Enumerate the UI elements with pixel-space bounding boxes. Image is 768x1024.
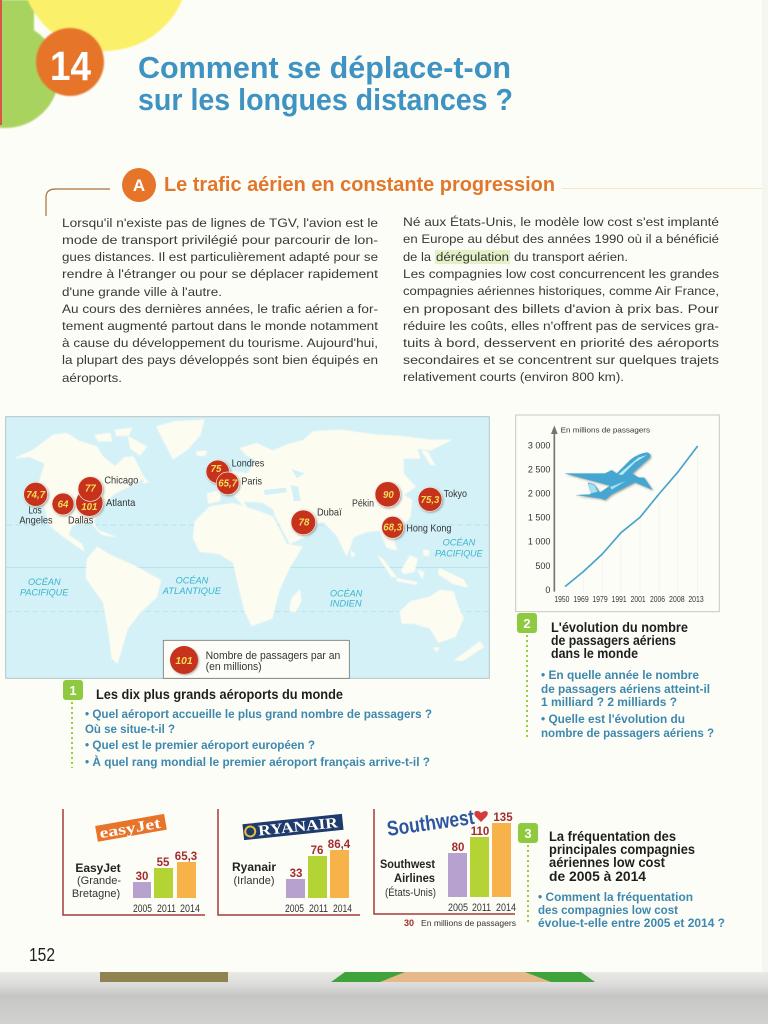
x axis: 2013 — [688, 595, 704, 604]
airport values: 68,3 — [383, 523, 403, 534]
airport values: 101 — [81, 502, 97, 513]
caption 2: evolution: L'évolution du nombre — [551, 620, 688, 635]
airport values: 65,7 — [218, 479, 238, 490]
ocean labels: OCÉAN — [176, 576, 209, 586]
continents west — [16, 420, 207, 663]
company label — [380, 857, 436, 899]
y axis: 1 500 — [528, 513, 550, 523]
city labels: Chicago — [104, 475, 138, 486]
caption 1: airports: • Quel aéroport accueille le plus grand nombre de passagers ? — [85, 709, 432, 721]
line chart: passengers: En millions de passagers — [561, 426, 650, 435]
text column right: de la — [403, 250, 431, 264]
text column left: rendre à l'étranger ou pour se déplacer rapidement — [62, 267, 379, 281]
title: sur les longues distances ? — [138, 82, 513, 117]
airport values: 64 — [58, 499, 69, 510]
ocean labels: OCÉAN — [330, 589, 363, 599]
x axis: 1991 — [612, 595, 627, 604]
ocean labels — [20, 538, 483, 609]
city labels: Atlanta — [106, 498, 136, 509]
airport values: 77 — [85, 484, 96, 495]
bar chart: Southwest: 2014 — [496, 902, 516, 914]
caption 2: evolution: • Quelle est l'évolution du — [541, 714, 685, 726]
x axis: 1969 — [573, 595, 589, 604]
caption 2: evolution: de passagers aériens atteint-il — [541, 684, 710, 696]
y axis — [528, 440, 550, 595]
chapter number badge — [36, 28, 104, 96]
text column left: d'une grande ville à l'autre. — [62, 285, 222, 299]
x axis: 2006 — [650, 595, 665, 604]
caption 3: low cost: évolue-t-elle entre 2005 et 2014 ? — [538, 918, 725, 930]
unit note: En millions de passagers — [421, 918, 516, 928]
text column left: la plupart des pays développés sont bien équipés en — [62, 353, 378, 367]
bar chart: Ryanair: 2011 — [309, 903, 328, 915]
bar chart: Southwest: 110 — [471, 826, 489, 838]
continents east — [193, 430, 483, 660]
city labels: Dubaï — [317, 508, 342, 519]
inland seas — [264, 469, 305, 501]
text column left — [62, 216, 379, 385]
text column left: Lorsqu'il n'existe pas de lignes de TGV, l'avion est le — [62, 216, 378, 230]
caption 1: airports: Où se situe-t-il ? — [85, 724, 175, 736]
caption 3: low cost: aériennes low cost — [549, 855, 665, 870]
ocean labels: OCÉAN — [28, 577, 61, 587]
ocean labels: ATLANTIQUE — [162, 586, 222, 596]
decorative corner shapes — [0, 0, 189, 128]
company label: Airlines — [394, 871, 435, 885]
caption 1: airports: 1 — [69, 683, 77, 698]
text column right: en proposant des billets d'avion à prix bas. Pour — [403, 302, 719, 316]
x axis — [554, 595, 704, 604]
city labels: Los — [28, 506, 42, 517]
company label — [232, 860, 276, 887]
page number: 152 — [29, 945, 55, 965]
bar chart: Ryanair: 86,4 — [328, 839, 351, 851]
x axis: 2001 — [631, 595, 646, 604]
map legend — [163, 640, 349, 678]
text column right: Les compagnies low cost concurrencent les grandes — [403, 267, 719, 281]
ocean labels: PACIFIQUE — [20, 587, 69, 597]
traffic curve — [565, 446, 698, 587]
unit note: 30 — [404, 918, 414, 928]
text column right: en Europe au début des années 1990 où il a bénéficié — [403, 232, 719, 246]
city labels: Paris — [241, 477, 262, 488]
airport values: 75,3 — [421, 495, 440, 506]
text column right: dérégulation — [436, 250, 509, 264]
bar chart: EasyJet: 2014 — [180, 903, 200, 915]
airport markers — [24, 460, 442, 538]
logo: easyJet — [95, 814, 167, 843]
company label — [72, 861, 121, 900]
company label: Southwest — [380, 857, 435, 871]
company label: EasyJet — [75, 861, 121, 875]
text column right: relativement courts (environ 800 km). — [403, 370, 624, 384]
logo: Southwest: Southwest — [385, 806, 476, 841]
ocean labels: INDIEN — [330, 599, 362, 609]
bar chart: EasyJet: 2011 — [157, 903, 176, 915]
airport values: 78 — [299, 517, 310, 528]
company label: Bretagne) — [72, 888, 120, 900]
x axis: 2008 — [669, 595, 685, 604]
caption 3: low cost: La fréquentation des — [549, 829, 676, 844]
bar chart: EasyJet: 55 — [157, 857, 170, 869]
caption 3: low cost: de 2005 à 2014 — [549, 869, 646, 884]
caption 1: airports — [63, 680, 432, 769]
bar chart: EasyJet — [63, 809, 205, 915]
caption 2: evolution: • En quelle année le nombre — [541, 670, 699, 682]
x axis: 1979 — [592, 595, 608, 604]
caption 2: evolution: nombre de passagers aériens ? — [541, 728, 714, 740]
map legend: (en millions) — [206, 661, 262, 673]
company label: (Irlande) — [234, 875, 274, 887]
airport values: 74,7 — [26, 490, 46, 501]
bar chart: Southwest: 2005 — [448, 902, 468, 914]
text column left: aéroports. — [62, 371, 122, 385]
title: Comment se déplace-t-on — [138, 50, 511, 85]
caption 3: low cost: des compagnies low cost — [538, 905, 678, 917]
airport values: 75 — [211, 464, 222, 475]
bar chart: Ryanair: 33 — [290, 868, 302, 880]
caption 3: low cost — [518, 823, 725, 930]
company label: (États-Unis) — [385, 886, 436, 899]
y axis: 0 — [545, 585, 550, 595]
caption 3: low cost: • Comment la fréquentation — [538, 892, 693, 904]
caption 1: airports: Les dix plus grands aéroports du monde — [96, 687, 343, 702]
caption 2: evolution — [517, 613, 714, 740]
bar chart: Southwest: 80 — [452, 842, 464, 854]
y axis: 500 — [535, 561, 550, 571]
map legend: Nombre de passagers par an — [206, 650, 340, 662]
y axis: 1 000 — [528, 537, 550, 547]
caption 1: airports: • À quel rang mondial le premier aéroport français arrive-t-il ? — [85, 756, 430, 769]
bar chart: EasyJet: 65,3 — [175, 851, 197, 863]
company label: (Grande- — [77, 875, 121, 887]
line chart: passengers — [516, 415, 719, 612]
city labels: Londres — [232, 459, 264, 470]
text column right: Né aux États-Unis, le modèle low cost s'est implanté — [403, 214, 719, 229]
y axis: 2 500 — [528, 465, 550, 475]
city labels: Tokyo — [444, 489, 467, 500]
city labels: Angeles — [19, 515, 53, 526]
text column left: gues distances. Il est particulièrement adapté pour se — [62, 250, 378, 264]
section heading A: A — [133, 176, 145, 195]
airport values: 90 — [383, 490, 394, 501]
chapter number badge: 14 — [50, 43, 91, 89]
x axis: 1950 — [554, 595, 570, 604]
caption 3: low cost: principales compagnies — [549, 842, 695, 857]
logo: easyJet: easyJet — [98, 816, 162, 842]
caption 2: evolution: de passagers aériens — [551, 633, 676, 648]
caption 3: low cost: 3 — [524, 826, 532, 841]
city labels — [19, 459, 467, 535]
company label: Ryanair — [232, 860, 276, 874]
bar chart: EasyJet: 2005 — [133, 903, 152, 915]
bar chart: Southwest: 135 — [493, 812, 513, 824]
city labels: Hong Kong — [406, 524, 451, 535]
airport values — [26, 464, 440, 534]
y axis: 3 000 — [528, 440, 550, 450]
text column right: secondaires et se concentrent sur quelques trajets — [403, 353, 719, 367]
text column right: tuits à bord, desservent en priorité des aéroports — [403, 336, 719, 350]
bar chart: Ryanair: 2014 — [333, 903, 352, 915]
section heading A: Le trafic aérien en constante progression — [164, 174, 555, 196]
logo: Ryanair: RYANAIR — [257, 815, 339, 840]
text column right: compagnies aériennes historiques, comme Air France, — [403, 284, 719, 298]
text column right — [403, 214, 719, 384]
bar chart: EasyJet: 30 — [136, 871, 148, 883]
ocean labels: PACIFIQUE — [435, 548, 483, 558]
caption 2: evolution: 1 milliard ? 2 milliards ? — [541, 697, 677, 709]
bar chart: Southwest — [374, 806, 516, 928]
icon: airplane — [564, 452, 653, 500]
text column left: tement augmenté partout dans le monde notamment — [62, 319, 379, 333]
logo: Ryanair — [242, 814, 344, 841]
y axis: 2 000 — [528, 489, 550, 499]
text column right: réduire les coûts, elles n'offrent pas de services gra- — [403, 319, 719, 333]
text column left: mode de transport privilégié pour parcourir de lon- — [62, 233, 378, 247]
map legend: 101 — [175, 656, 193, 667]
ocean labels: OCÉAN — [443, 538, 476, 548]
caption 2: evolution: dans le monde — [551, 646, 638, 661]
world map — [6, 417, 489, 678]
section heading A — [46, 168, 762, 216]
city labels: Dallas — [68, 515, 93, 526]
title — [138, 50, 513, 117]
bar chart: Ryanair: 76 — [311, 845, 323, 857]
caption 1: airports: • Quel est le premier aéroport européen ? — [85, 740, 315, 752]
text column left: Au cours des dernières années, le trafic aérien a for- — [62, 302, 378, 316]
bar chart: Ryanair — [218, 809, 360, 915]
text column right: du transport aérien. — [514, 250, 628, 264]
city labels: Pékin — [352, 499, 374, 510]
bar chart: Southwest: 2011 — [472, 902, 491, 914]
caption 2: evolution: 2 — [523, 616, 531, 631]
text column left: à cause du développement du tourisme. Aujourd'hui, — [62, 336, 378, 350]
bar chart: Ryanair: 2005 — [285, 903, 304, 915]
